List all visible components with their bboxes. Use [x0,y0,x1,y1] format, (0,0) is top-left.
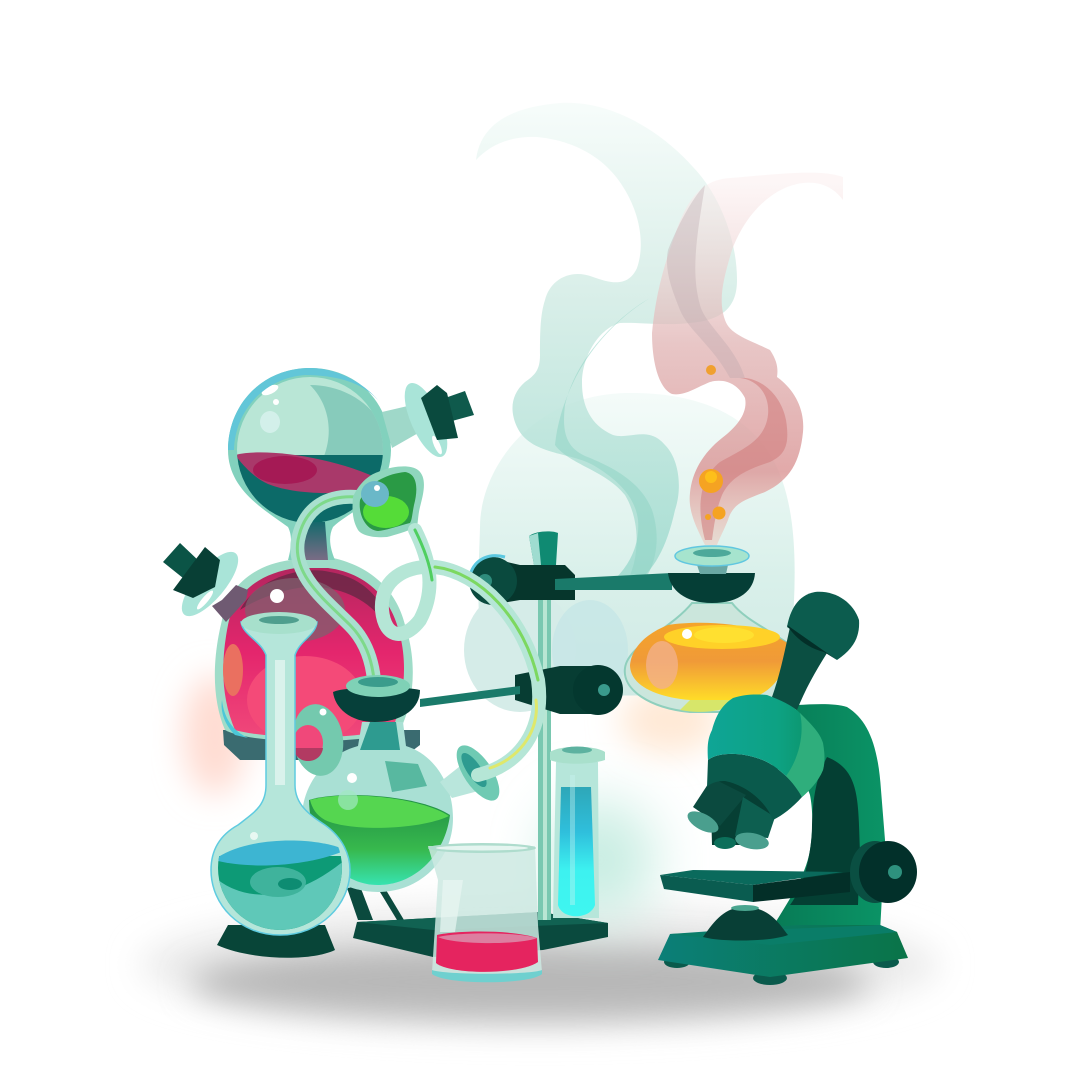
microscope arm [770,704,885,932]
microscope focus knob [850,841,917,903]
icon: right stopper [421,385,474,440]
stand rod [529,531,558,920]
green looping tube [382,530,539,775]
green flask side neck and flange [440,739,508,807]
ground shadow [140,903,940,1027]
microscope eyepiece tube [772,627,827,710]
coloured glows [183,675,720,920]
tall flask base [217,925,335,958]
test tube [550,746,605,918]
illustration: chemistry laboratory [148,103,932,1042]
microscope eyepiece [787,592,859,660]
beaker [428,843,542,982]
ring handle on tall flask [288,701,348,779]
teal smoke inner fold [555,298,657,585]
teal smoke plume [476,103,737,590]
red smoke plume [652,173,843,545]
microscope [658,592,917,985]
teal background vapour [464,393,795,712]
microscope base feet [664,956,899,985]
microscope base [658,925,908,977]
tall flask [211,612,350,938]
stand base and legs [347,886,608,957]
orange flask [625,603,790,712]
red smoke inner folds [667,185,787,540]
green flask support ring [333,675,520,722]
upper clamp [469,556,575,605]
pink round flask [215,558,413,744]
top flask [228,368,391,560]
lower clamp [515,665,623,715]
microscope arm shade [790,757,860,905]
green feed tube [297,497,374,680]
microscope dark collar [707,754,802,820]
microscope objectives [684,765,778,852]
orange bubbles [699,365,726,520]
orange flask support arm [555,573,672,590]
microscope head [708,694,824,797]
microscope stage [660,870,850,902]
orange flask support ring [668,546,755,603]
pink flask side neck and flange [173,544,248,624]
lower left platform [223,730,420,760]
icon: left stopper [163,543,220,598]
green glass bulb [353,466,424,537]
microscope lamp dome [703,905,788,941]
green flask [302,722,453,892]
top flask side neck and flange [382,377,456,463]
